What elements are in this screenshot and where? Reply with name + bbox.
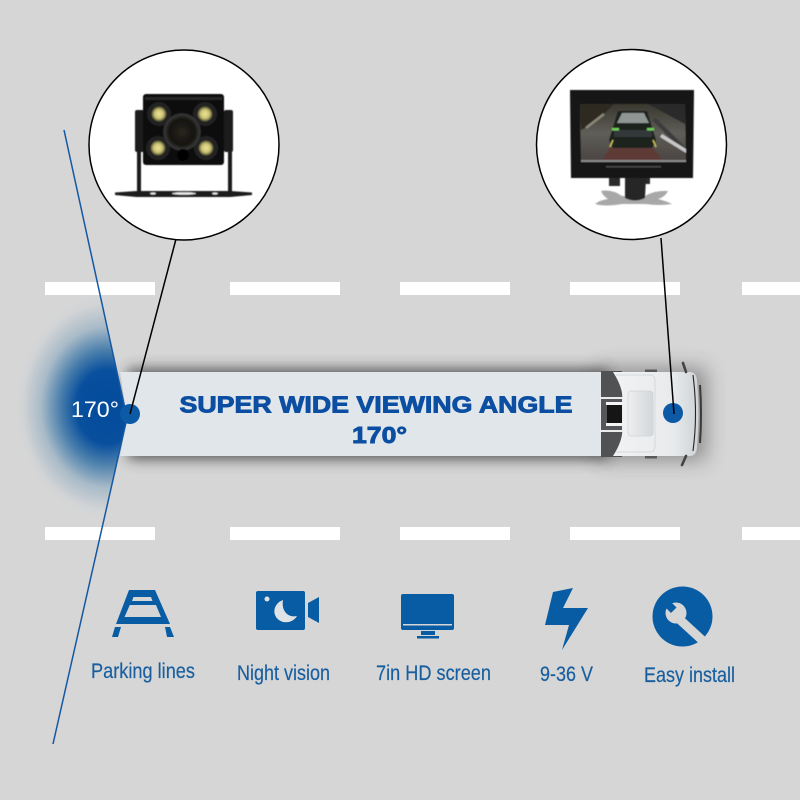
rear camera marker dot (120, 404, 140, 424)
icon: wrench (652, 586, 712, 646)
truck shadow: trailer (128, 369, 608, 459)
truck shadow: cab (598, 368, 706, 460)
icon: monitor on stand (570, 90, 694, 206)
angle label: 170° (71, 397, 119, 422)
viewing angle boundary line (53, 130, 127, 744)
label: 9-36 V (540, 662, 594, 686)
connector line to camera (130, 239, 176, 414)
heading on truck: 170° (352, 422, 407, 448)
road markings: lower dashed line (45, 527, 800, 540)
label: Easy install (644, 663, 735, 687)
truck cab (600, 363, 701, 465)
heading on truck: SUPER WIDE VIEWING ANGLE (180, 392, 572, 418)
icon: rear camera (115, 94, 252, 197)
camera callout circle (89, 50, 279, 240)
front monitor marker dot (663, 403, 683, 423)
truck trailer body (120, 372, 601, 456)
icon: HD screen (401, 594, 454, 638)
road markings: upper dashed line (45, 282, 800, 295)
icon: night vision camera (256, 591, 319, 630)
feature: parking lines (91, 590, 195, 683)
icon: lightning bolt (545, 588, 588, 650)
truck seen from above (120, 363, 701, 465)
feature: easy install (644, 586, 735, 687)
label: Night vision (237, 661, 330, 685)
feature: night vision (237, 591, 330, 685)
heading on truck (180, 392, 572, 448)
label: Parking lines (91, 659, 195, 683)
feature: voltage (540, 588, 594, 686)
feature: screen (376, 594, 491, 685)
viewing angle glow (24, 306, 126, 508)
icon: parking lines (112, 590, 174, 637)
connector line to monitor (661, 238, 674, 414)
label: 7in HD screen (376, 661, 491, 685)
monitor callout circle (536, 50, 726, 240)
